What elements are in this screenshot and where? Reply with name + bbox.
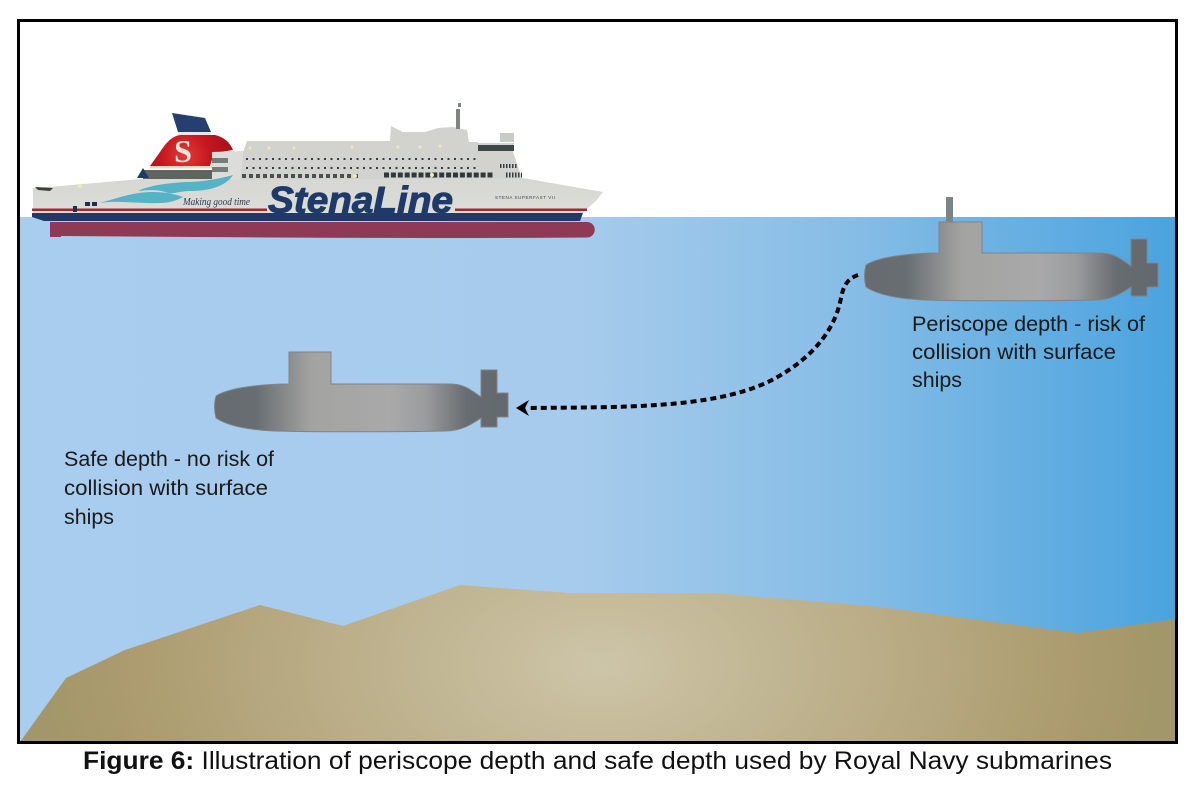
ship lower hull	[50, 222, 595, 238]
ship swoosh	[100, 175, 233, 203]
caption: Figure 6: Illustration of periscope depth and safe depth used by Royal Navy submarines	[83, 747, 1112, 775]
ship navy band	[32, 213, 583, 221]
periscope	[946, 197, 953, 222]
label: safe depth: Safe depth - no risk of	[64, 447, 274, 471]
water	[20, 217, 1176, 742]
label: periscope depth: ships	[912, 368, 962, 392]
ship slogan: Making good time	[182, 197, 250, 208]
ship bridge	[478, 145, 514, 151]
submarine at periscope depth	[864, 197, 1158, 301]
ship funnel	[150, 135, 233, 166]
submarine at safe depth	[214, 352, 508, 432]
label: safe depth: ships	[64, 505, 114, 529]
ship deck below funnel	[137, 151, 243, 180]
ship stern windows	[73, 202, 97, 212]
ship mast	[456, 103, 461, 129]
ship deck lights	[78, 144, 442, 188]
ship upper windows	[242, 159, 522, 176]
label: periscope depth: collision with surface	[912, 340, 1116, 364]
ship bow name: STENA SUPERFAST VII	[495, 195, 555, 200]
ship upper hull	[33, 178, 603, 213]
ship stern fittings	[35, 187, 53, 191]
submarine hull	[864, 222, 1158, 301]
ship superstructure	[240, 126, 522, 180]
ship red stripes	[32, 208, 587, 211]
ship name: StenaLine	[268, 180, 453, 220]
ship funnel logo: S	[174, 133, 192, 169]
ship: Stena Line ferry	[32, 103, 603, 238]
label: periscope depth: Periscope depth - risk of	[912, 312, 1145, 336]
label: safe depth: collision with surface	[64, 476, 268, 500]
arrow: descent from periscope to safe depth	[516, 275, 858, 416]
ship bridge top	[500, 133, 514, 142]
ship funnel top	[172, 113, 211, 132]
seabed	[20, 585, 1176, 742]
